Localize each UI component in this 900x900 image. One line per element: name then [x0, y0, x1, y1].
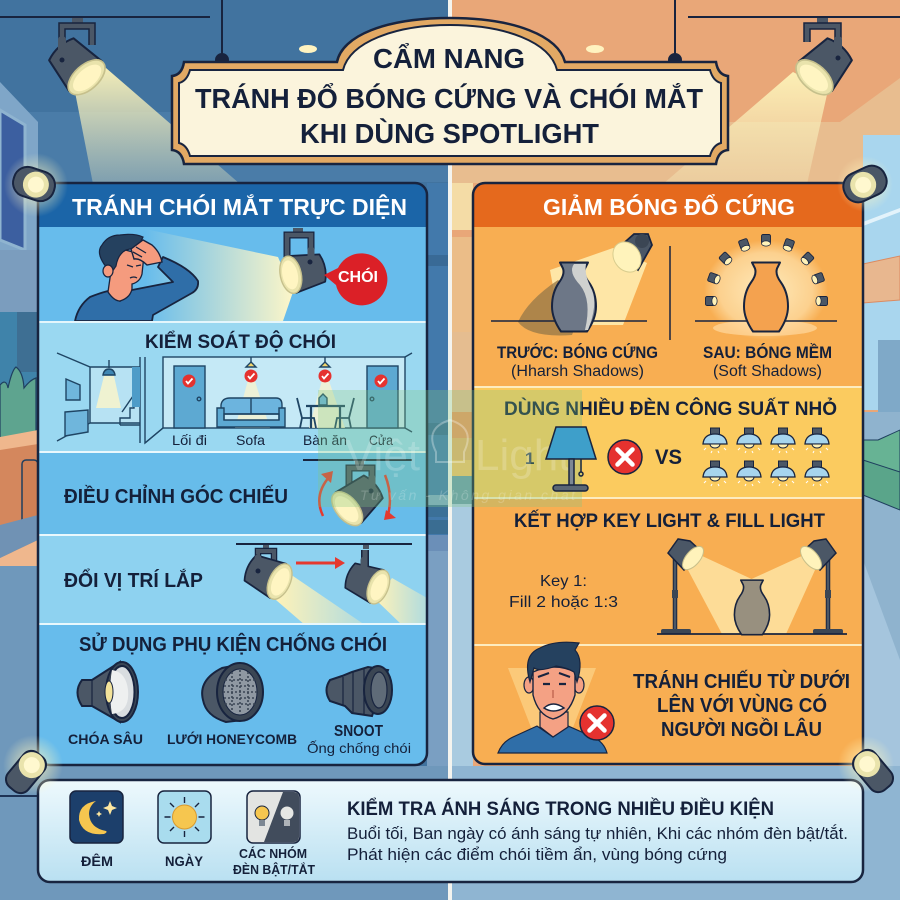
caption: after subtext: (Soft Shadows) — [713, 363, 822, 380]
title plaque — [172, 18, 728, 164]
icon: corner spotlight top left — [4, 153, 68, 217]
label: light groups line 1: CÁC NHÓM — [239, 846, 307, 861]
panel heading: GIẢM BÓNG ĐỔ CỨNG — [543, 192, 795, 220]
watermark — [318, 390, 582, 507]
icon: grid of small lamps — [703, 428, 829, 486]
label: corridor: Lối đi — [172, 432, 207, 448]
title line 2: TRÁNH ĐỔ BÓNG CỨNG VÀ CHÓI MẮT — [195, 83, 703, 114]
icon: night — [70, 791, 123, 843]
section heading: DÙNG NHIỀU ĐÈN CÔNG SUẤT NHỎ — [504, 398, 837, 420]
body line 1: Buổi tối, Ban ngày có ánh sáng tự nhiên, Khi các nhóm đèn bật/tắt. — [347, 824, 848, 843]
caption: before subtext: (Hharsh Shadows) — [511, 363, 644, 380]
section: adjust beam angle — [38, 451, 427, 535]
watermark: Light — [475, 431, 570, 480]
panel: reduce hard shadows — [473, 183, 863, 764]
callout: glare — [324, 253, 387, 305]
illustration: soft shadow vase — [695, 234, 837, 340]
label: snoot description: Ống chống chói — [307, 739, 411, 756]
section: glare illustration — [75, 228, 387, 321]
section heading: ĐỔI VỊ TRÍ LẮP — [64, 568, 203, 592]
room diagram — [57, 353, 412, 443]
section: key and fill light — [474, 497, 862, 635]
background: blue interior — [0, 0, 448, 900]
section: avoid lighting from below — [474, 642, 862, 753]
title line 3: KHI DÙNG SPOTLIGHT — [300, 118, 599, 149]
background: warm interior — [452, 0, 900, 900]
icon: corner spotlight bottom right — [838, 736, 897, 796]
icon: snoot — [326, 666, 392, 716]
icon: cross — [580, 706, 614, 740]
label: day: NGÀY — [165, 853, 204, 869]
panel heading: TRÁNH CHÓI MẮT TRỰC DIỆN — [72, 193, 407, 220]
icon: honeycomb grid — [202, 663, 263, 722]
section: before and after shadows — [491, 234, 837, 380]
light beam from top left spotlight — [75, 68, 240, 184]
label: deep reflector: CHÓA SÂU — [68, 730, 143, 747]
text: warning line 2: LÊN VỚI VÙNG CÓ — [657, 693, 827, 717]
illustration: key and fill lights on vase — [657, 539, 847, 635]
text: one: 1 — [525, 449, 534, 468]
text: versus: VS — [655, 446, 682, 469]
icon: two spotlights on a rail — [236, 544, 427, 625]
heading: KIỂM TRA ÁNH SÁNG TRONG NHIỀU ĐIỀU KIỆN — [347, 798, 774, 820]
icon: day — [158, 791, 211, 843]
watermark: Tư vấn - Không gian chất — [360, 487, 576, 503]
icon: corner spotlight bottom left — [2, 735, 63, 797]
divider — [669, 246, 671, 340]
panel heading — [473, 183, 863, 227]
label: snoot: SNOOT — [334, 723, 383, 740]
icon: table lamp — [546, 427, 596, 491]
section heading: SỬ DỤNG PHỤ KIỆN CHỐNG CHÓI — [79, 632, 387, 656]
icon: lights on and off — [247, 791, 300, 843]
panel background — [473, 183, 863, 764]
label: honeycomb: LƯỚI HONEYCOMB — [167, 730, 297, 747]
label: night: ĐÊM — [81, 852, 113, 869]
icon: top right spotlight — [790, 18, 858, 101]
light beam from top right spotlight — [663, 72, 828, 184]
panel outline — [473, 183, 863, 764]
text: ratio line 1: Key 1: — [540, 573, 587, 590]
panel outline — [38, 183, 427, 765]
title line 1: CẨM NANG — [373, 43, 525, 74]
label: light groups line 2: ĐÈN BẬT/TẮT — [233, 862, 315, 877]
body line 2: Phát hiện các điểm chói tiềm ẩn, vùng bóng cứng — [347, 846, 727, 864]
section heading: ĐIỀU CHỈNH GÓC CHIẾU — [64, 484, 288, 508]
centre divider — [448, 0, 452, 900]
label: dining table: Bàn ăn — [303, 432, 347, 448]
caption: after: SAU: BÓNG MỀM — [703, 343, 832, 362]
illustration: hard shadow vase — [491, 234, 652, 335]
panel: avoid direct glare — [38, 183, 427, 765]
icon: corner spotlight top right — [837, 156, 893, 212]
icon: deep reflector — [78, 662, 138, 722]
section: move fixture — [38, 534, 427, 625]
icons: check marks — [182, 370, 388, 388]
watermark: Việt — [345, 431, 420, 480]
text: warning line 1: TRÁNH CHIẾU TỪ DƯỚI — [633, 669, 850, 693]
icon: spotlight — [277, 228, 329, 295]
recessed ceiling lights — [299, 45, 604, 53]
panel: test lighting in multiple conditions — [38, 780, 863, 882]
ceiling rails and wires — [0, 0, 900, 66]
callout: glare: CHÓI — [338, 267, 378, 286]
icon: cross — [608, 440, 642, 474]
text: warning line 3: NGƯỜI NGỒI LÂU — [661, 717, 822, 741]
panel background — [38, 183, 427, 765]
label: door: Cửa — [369, 432, 393, 448]
icon: tilting spotlight — [303, 460, 412, 531]
label: sofa: Sofa — [236, 432, 265, 448]
section: many low power lamps — [474, 386, 862, 498]
section heading: KIỂM SOÁT ĐỘ CHÓI — [145, 331, 336, 353]
section: control brightness — [38, 321, 427, 452]
icon: top left spotlight — [43, 18, 111, 101]
text: ratio line 2: Fill 2 hoặc 1:3 — [509, 594, 618, 611]
panel heading — [38, 183, 427, 227]
illustration: man lit from below — [498, 642, 607, 753]
icon: man shading eyes — [75, 234, 198, 321]
section: anti glare accessories — [38, 623, 427, 756]
section heading: KẾT HỢP KEY LIGHT & FILL LIGHT — [514, 510, 825, 532]
caption: before: TRƯỚC: BÓNG CỨNG — [497, 343, 658, 362]
